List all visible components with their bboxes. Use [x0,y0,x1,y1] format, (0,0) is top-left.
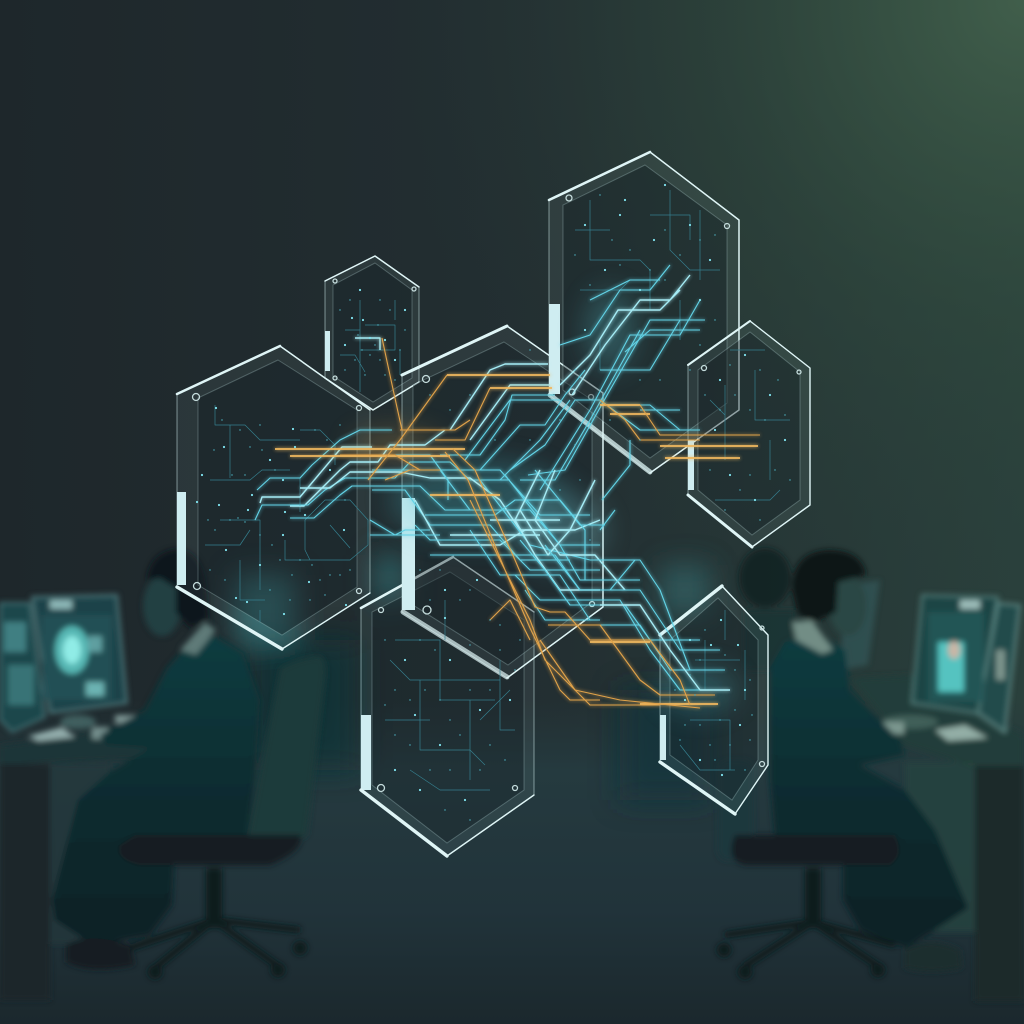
data points [197,185,790,820]
faint circuit traces in panels [205,190,790,790]
hexagon: small top left [325,256,419,410]
hexagon: top right [549,152,739,473]
hexagon: lower right [660,586,768,814]
left chair seat and base [119,835,307,979]
left desk [0,712,250,1000]
right worker scene [717,548,1024,1001]
right background worker [739,548,880,670]
right chair back [718,760,753,860]
hexagon: lower centre [361,557,534,856]
right monitor rear [978,603,1020,732]
left worker figure [52,549,260,969]
left keyboard and hands [28,715,139,741]
left worker scene [0,549,325,1000]
central light glow [350,290,738,712]
left monitor front [32,595,127,713]
right monitor front [912,595,998,713]
floor [0,700,1024,1024]
right keyboard and hands [882,715,988,741]
left chair back [247,656,325,858]
circuit traces: cyan [255,265,730,690]
circuit traces: gold [275,338,760,708]
hexagon: centre [402,326,603,678]
hexagon: large left [177,346,370,649]
blurred background office [235,555,710,800]
right desk [850,675,1024,1001]
right chair seat and base [717,835,899,979]
hexagon: right [688,321,810,547]
left monitor rear [0,603,45,732]
right worker figure [770,550,968,972]
